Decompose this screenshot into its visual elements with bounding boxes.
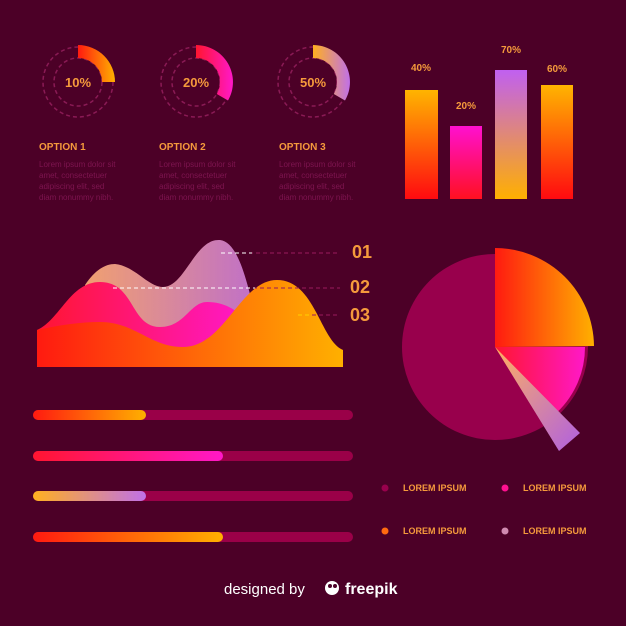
option texts: OPTION 1 <box>39 142 86 153</box>
pie chart <box>402 248 594 451</box>
option texts: diam nonummy nibh. <box>39 193 113 202</box>
footer credit <box>224 581 398 598</box>
mountain chart: 03 <box>350 305 370 325</box>
option texts: adipiscing elit, sed <box>159 182 224 191</box>
mountain chart: 01 <box>352 242 372 262</box>
pie legend: LOREM IPSUM <box>523 483 587 493</box>
option texts <box>39 142 356 202</box>
pie legend: LOREM IPSUM <box>403 483 467 493</box>
bar chart: 60% <box>547 64 567 75</box>
mountain chart: 02 <box>350 277 370 297</box>
option texts: OPTION 2 <box>159 142 206 153</box>
option texts: adipiscing elit, sed <box>279 182 344 191</box>
bar chart: 20% <box>456 101 476 112</box>
mountain chart <box>37 240 372 367</box>
progress bars <box>33 410 353 542</box>
donut: option 1: 10% <box>65 75 91 90</box>
footer credit: freepik <box>345 581 398 598</box>
pie legend <box>382 483 587 536</box>
option texts: adipiscing elit, sed <box>39 182 104 191</box>
pie legend: LOREM IPSUM <box>403 526 467 536</box>
pie legend: LOREM IPSUM <box>523 526 587 536</box>
option texts: Lorem ipsum dolor sit <box>279 160 356 169</box>
option texts: Lorem ipsum dolor sit <box>39 160 116 169</box>
footer credit: designed by <box>224 581 305 598</box>
donut: option 3 <box>278 45 350 117</box>
option texts: diam nonummy nibh. <box>279 193 353 202</box>
option texts: amet, consectetuer <box>39 171 107 180</box>
donut: option 1 <box>43 45 115 117</box>
option texts: diam nonummy nibh. <box>159 193 233 202</box>
donut: option 2: 20% <box>183 75 209 90</box>
donut: option 2 <box>161 45 233 117</box>
option texts: Lorem ipsum dolor sit <box>159 160 236 169</box>
option texts: amet, consectetuer <box>279 171 347 180</box>
option texts: OPTION 3 <box>279 142 326 153</box>
bar chart: 70% <box>501 45 521 56</box>
bar chart <box>405 45 573 199</box>
bar chart: 40% <box>411 63 431 74</box>
donut: option 3: 50% <box>300 75 326 90</box>
option texts: amet, consectetuer <box>159 171 227 180</box>
